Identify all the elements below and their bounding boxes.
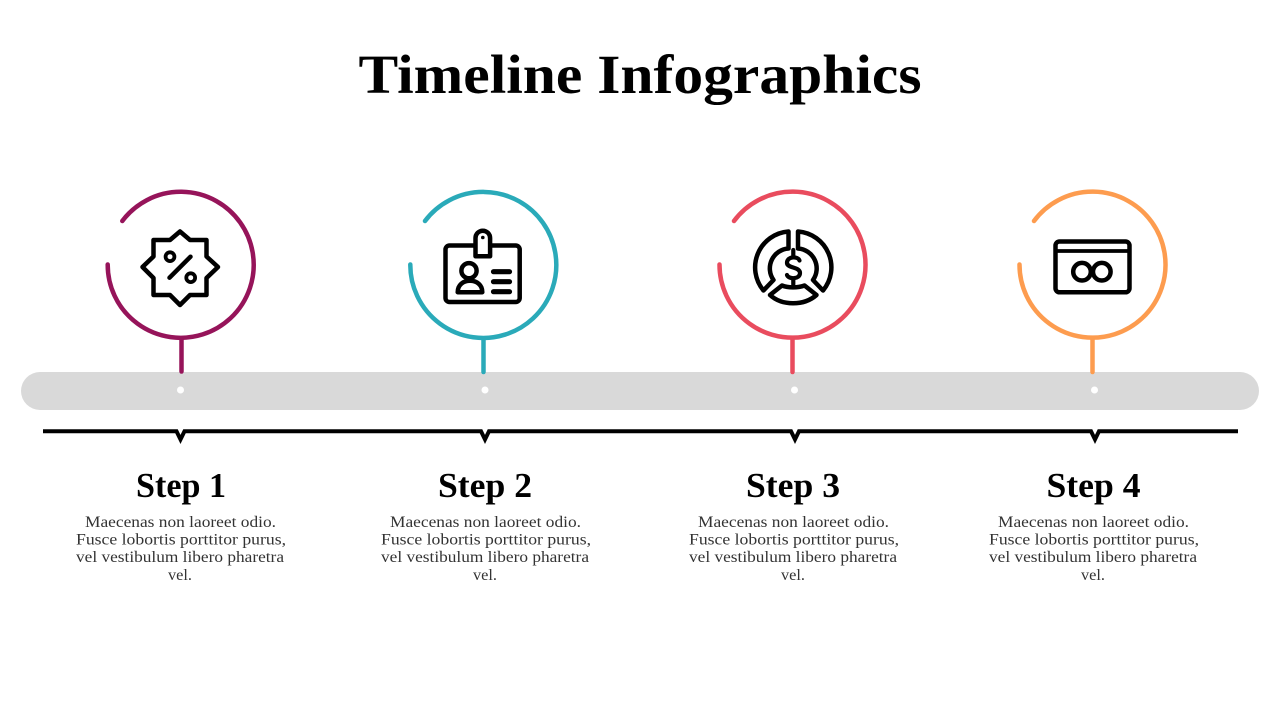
step 3 text bbox=[689, 466, 899, 584]
icon: percent badge bbox=[142, 232, 218, 305]
step 1 text: Fusce lobortis porttitor purus, bbox=[76, 532, 286, 548]
step 4 ring bbox=[1019, 192, 1165, 372]
step 2 text: Step 2 bbox=[438, 466, 532, 505]
icon: dollar pie bbox=[755, 232, 831, 303]
step 4 text: Step 4 bbox=[1046, 466, 1140, 505]
step 2 text: Maecenas non laoreet odio. bbox=[390, 514, 581, 531]
step 1 text: Step 1 bbox=[136, 466, 226, 505]
step 2 text: Fusce lobortis porttitor purus, bbox=[381, 532, 591, 548]
step 1 ring bbox=[108, 192, 254, 372]
bracket line with notches bbox=[43, 431, 1238, 440]
step 3 text: Fusce lobortis porttitor purus, bbox=[689, 532, 899, 548]
step 1 text bbox=[76, 466, 286, 584]
step 3 ring bbox=[719, 192, 865, 372]
timeline bar bbox=[21, 372, 1259, 410]
step 1 text: Maecenas non laoreet odio. bbox=[85, 514, 276, 531]
step 4 text: Maecenas non laoreet odio. bbox=[998, 514, 1189, 531]
step 2 text bbox=[381, 466, 591, 584]
step 1 text: vel. bbox=[168, 567, 192, 584]
step 4 text: vel vestibulum libero pharetra bbox=[989, 549, 1197, 566]
title: Timeline Infographics bbox=[358, 44, 922, 105]
step 2 text: vel vestibulum libero pharetra bbox=[381, 549, 589, 566]
step 3 text: Maecenas non laoreet odio. bbox=[698, 514, 889, 531]
step 3 text: Step 3 bbox=[746, 466, 840, 505]
step 3 text: vel. bbox=[781, 567, 805, 584]
step 4 text bbox=[989, 466, 1199, 584]
step 2 text: vel. bbox=[473, 567, 497, 584]
step 4 text: vel. bbox=[1081, 567, 1105, 584]
step 2 ring bbox=[410, 192, 556, 372]
icon: id badge bbox=[446, 231, 520, 302]
step 1 text: vel vestibulum libero pharetra bbox=[76, 549, 284, 566]
icon: credit card bbox=[1056, 242, 1130, 292]
step 4 text: Fusce lobortis porttitor purus, bbox=[989, 532, 1199, 548]
step 3 text: vel vestibulum libero pharetra bbox=[689, 549, 897, 566]
